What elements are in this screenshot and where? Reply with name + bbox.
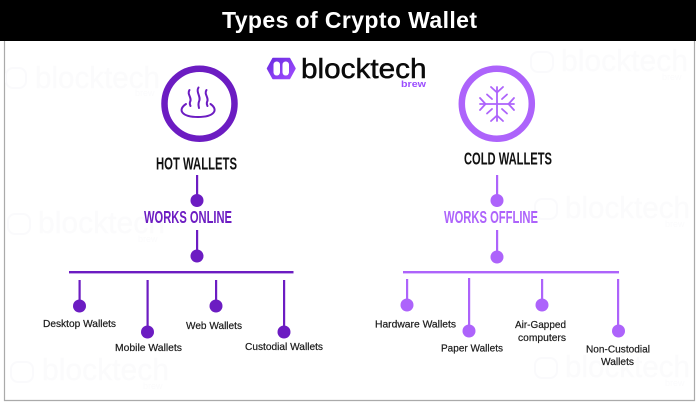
watermark: top left: blocktech — [35, 60, 160, 95]
item: air-gapped computers: computers — [518, 332, 566, 344]
logo: blocktech brew: blocktech — [301, 53, 426, 84]
hot wallets branch — [43, 69, 323, 354]
item: hardware wallets: Hardware Wallets — [375, 318, 456, 330]
item: paper wallets: Paper Wallets — [441, 342, 503, 354]
item: air-gapped computers — [515, 279, 566, 344]
watermark: middle right: brew — [665, 219, 685, 229]
watermark: bottom left: brew — [143, 381, 163, 391]
heading: cold wallets: COLD WALLETS — [464, 148, 552, 168]
item: web wallets: Web Wallets — [186, 320, 242, 332]
watermark: bottom left: blocktech — [42, 352, 169, 387]
item: web wallets — [186, 280, 242, 332]
item: air-gapped computers: Air-Gapped — [515, 319, 566, 331]
connector: works online to bar — [190, 230, 204, 262]
item: hardware wallets — [375, 279, 456, 330]
icon: cold wallet ring with snowflake — [462, 69, 532, 139]
item: mobile wallets — [115, 280, 182, 354]
connector: works offline to bar — [490, 230, 504, 264]
connector: cold to works offline — [490, 175, 504, 207]
watermark: bottom right: blocktech — [565, 349, 690, 384]
watermark: top right: blocktech — [561, 43, 688, 78]
item: custodial wallets — [245, 280, 323, 353]
logo: blocktech brew — [268, 53, 427, 90]
horizontal bar — [403, 271, 619, 273]
logo: blocktech brew: brew — [401, 79, 427, 90]
item: non-custodial wallets: Non-Custodial — [586, 344, 650, 356]
subheading: works offline: WORKS OFFLINE — [444, 207, 538, 227]
item: custodial wallets: Custodial Wallets — [245, 341, 323, 353]
watermark: middle right: blocktech — [565, 190, 690, 225]
item: mobile wallets: Mobile Wallets — [115, 342, 182, 354]
watermark: middle right — [535, 190, 690, 229]
watermark: bottom right: brew — [665, 378, 685, 388]
item: desktop wallets: Desktop Wallets — [43, 318, 116, 330]
item: desktop wallets — [43, 280, 116, 330]
watermark: top right: brew — [662, 72, 682, 82]
icon: hot wallet ring with steam — [164, 69, 234, 139]
cold wallets branch — [375, 69, 650, 368]
watermark: middle left: brew — [138, 234, 158, 244]
title bar — [0, 0, 696, 41]
title bar: Types of Crypto Wallet — [222, 7, 477, 33]
item: paper wallets — [441, 278, 503, 354]
watermark: top left: brew — [135, 88, 155, 98]
watermark: middle left: blocktech — [38, 205, 165, 240]
item: non-custodial wallets — [586, 279, 650, 368]
item: non-custodial wallets: Wallets — [601, 356, 634, 368]
subheading: works online: WORKS ONLINE — [144, 207, 232, 227]
horizontal bar — [69, 271, 294, 273]
connector: hot to works online — [190, 175, 204, 207]
heading: hot wallets: HOT WALLETS — [156, 154, 237, 174]
watermark: bottom right — [535, 349, 690, 388]
